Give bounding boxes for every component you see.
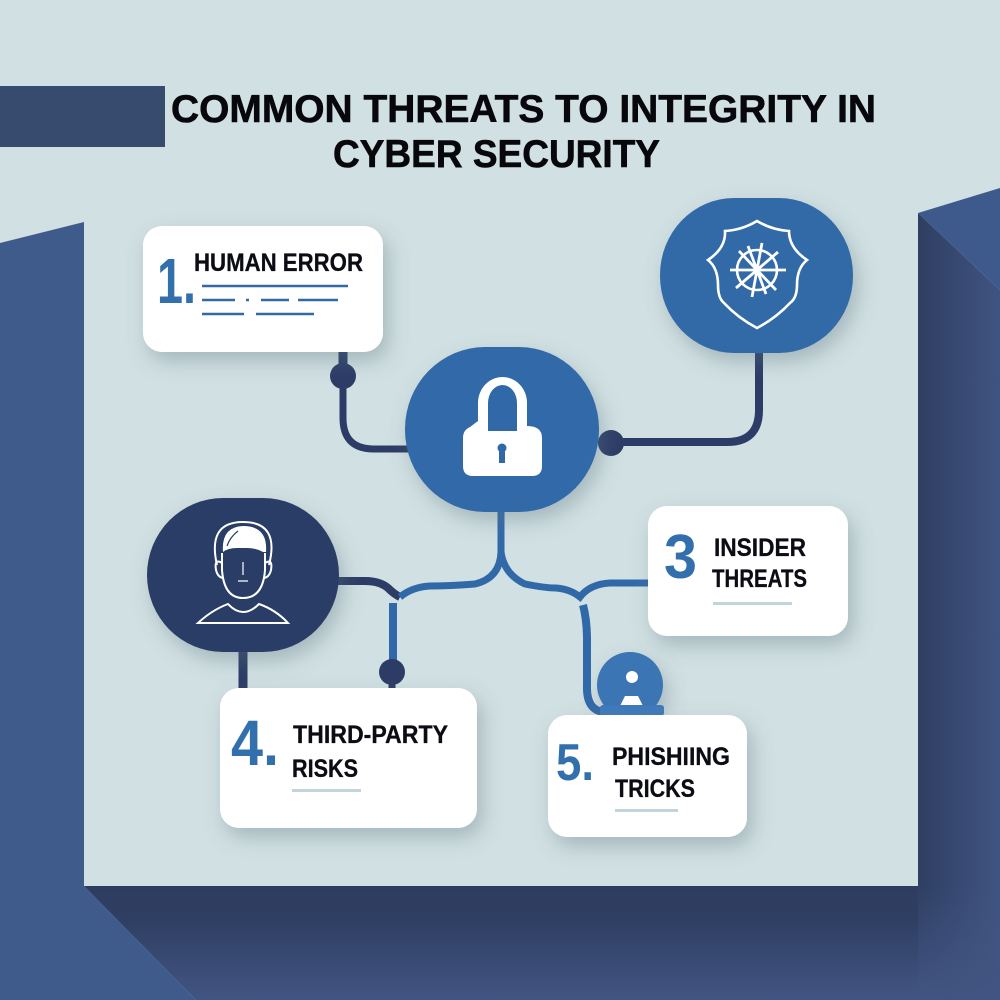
underline xyxy=(292,789,361,792)
connector: human error to lock xyxy=(343,376,412,449)
left blue band xyxy=(0,222,196,1000)
label: insider threats xyxy=(712,534,807,593)
connector: lock to left branch xyxy=(400,510,501,597)
connector: person to junction xyxy=(338,581,400,597)
card: human error xyxy=(143,226,383,352)
label: third-party risks: RISKS xyxy=(292,755,358,783)
icon: person circle xyxy=(147,498,339,652)
connector: human error stub xyxy=(338,350,348,376)
icon: shield circle xyxy=(660,198,853,353)
node: third-party connector dot xyxy=(379,659,405,685)
connector: to third-party xyxy=(389,603,397,680)
label: phishing tricks: TRICKS xyxy=(615,775,695,803)
label: human error: HUMAN ERROR xyxy=(194,249,363,277)
right dark band xyxy=(918,213,1000,1000)
bottom right corner fade xyxy=(918,886,1000,1000)
icon: phishing badge xyxy=(597,652,664,718)
label: third-party risks: THIRD-PARTY xyxy=(293,721,448,749)
connector lines xyxy=(243,350,759,712)
title accent bar xyxy=(0,86,165,147)
title: COMMON THREATS TO INTEGRITY IN xyxy=(171,88,876,131)
icon: shield with wheel xyxy=(708,221,807,328)
text placeholder lines xyxy=(202,286,348,314)
title: CYBER SECURITY xyxy=(333,133,660,176)
underline xyxy=(713,602,792,605)
label: third-party risks xyxy=(292,721,448,783)
card: phishing tricks xyxy=(548,715,747,837)
connector: third-party dot stub xyxy=(388,672,396,692)
node: shield connector dot xyxy=(598,430,624,456)
title xyxy=(171,88,876,176)
number 3: 3 xyxy=(664,523,697,592)
card: third-party risks xyxy=(220,688,477,828)
node: human error connector dot xyxy=(330,363,356,389)
icon: lock circle xyxy=(405,347,599,512)
connector: person to third-party xyxy=(238,650,248,692)
icon: padlock xyxy=(463,377,542,476)
icon: person xyxy=(198,522,288,623)
connector: shield to lock xyxy=(612,350,759,442)
underline xyxy=(615,809,678,812)
right top blue facet xyxy=(918,188,1000,290)
connector: to phishing xyxy=(583,605,625,712)
connector: lock to right branch xyxy=(501,552,650,597)
number 5: 5. xyxy=(556,734,594,792)
label: phishing tricks: PHISHIING xyxy=(612,743,730,771)
number 1: 1. xyxy=(157,245,196,317)
card: insider threats xyxy=(648,506,848,636)
label: phishing tricks xyxy=(612,743,730,803)
label: insider threats: THREATS xyxy=(712,565,807,593)
number 4: 4. xyxy=(231,707,279,779)
label: insider threats: INSIDER xyxy=(714,534,806,562)
bottom dark band xyxy=(84,886,918,1000)
